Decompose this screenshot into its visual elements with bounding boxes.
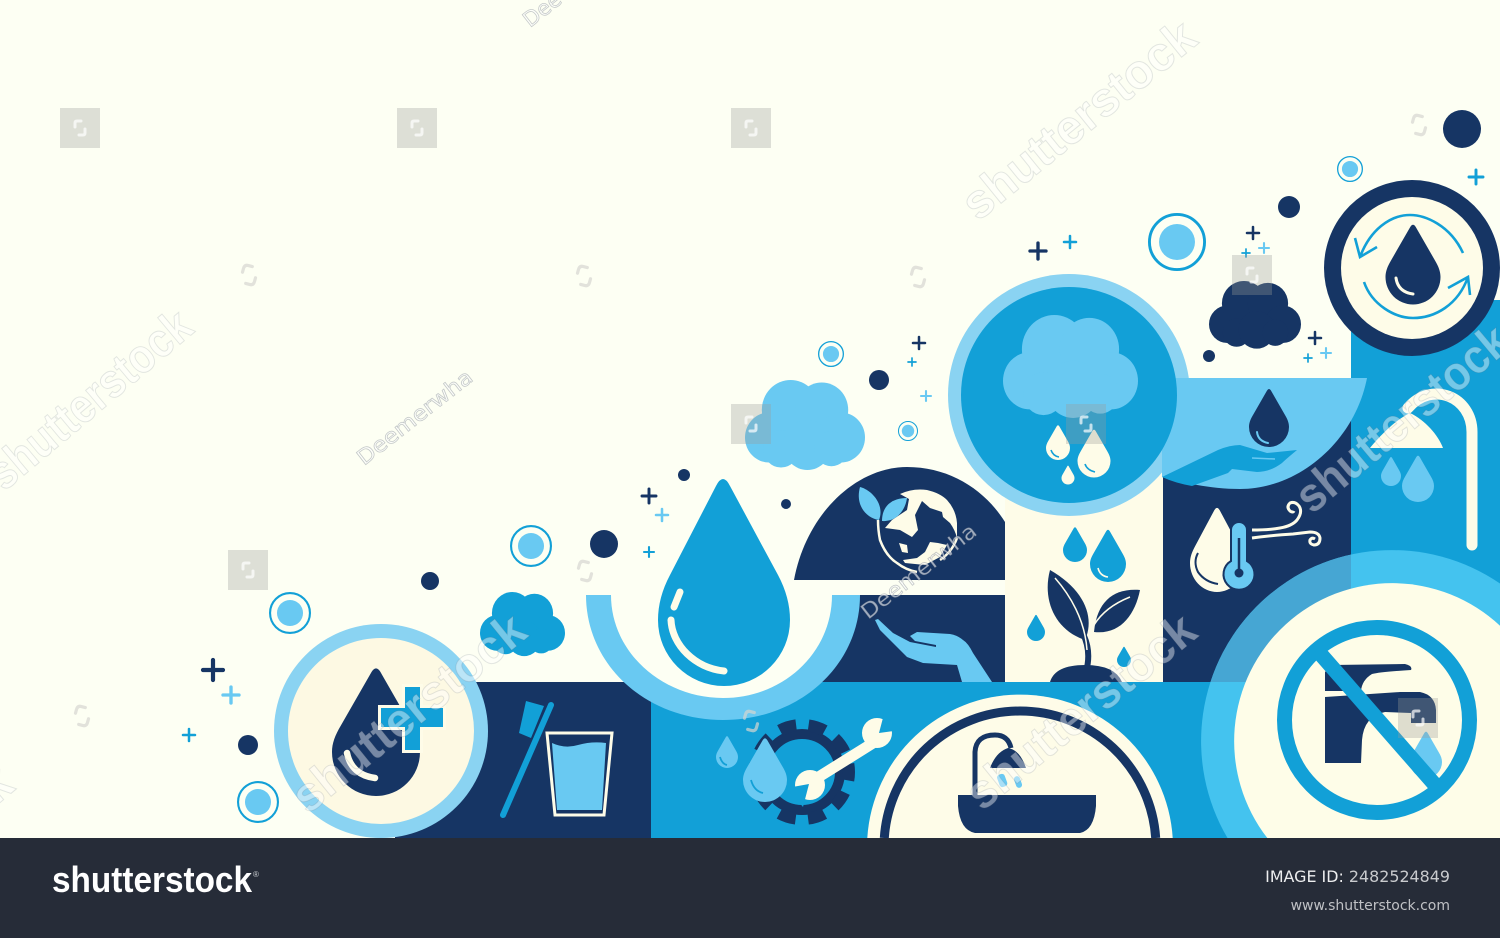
decorative ring bubbles — [237, 156, 1363, 823]
stock watermarks: shutterstock — [952, 10, 1207, 231]
icon: bathtub badge — [867, 695, 1173, 838]
panel: navy toothbrush tile — [395, 682, 652, 838]
mosaic artwork — [274, 180, 1500, 838]
stock watermarks: Deemerwha — [352, 365, 477, 470]
icon: big water drop — [658, 479, 790, 686]
stock watermarks: Deemerwha — [856, 519, 981, 624]
icon: glass of water — [547, 733, 612, 815]
icon: gear and wrench with drops — [716, 714, 901, 819]
footer logo: shutterstock — [52, 859, 253, 900]
panel: navy dome with globe — [794, 467, 1005, 580]
icon: shower on blue column — [1370, 394, 1472, 545]
stock watermarks: shutterstock — [282, 603, 537, 824]
rain circle disc — [961, 287, 1177, 503]
panel: cream plant tile — [1005, 470, 1163, 682]
panel: blue base band — [651, 682, 1500, 838]
icon: plant with drops — [1027, 527, 1140, 682]
icon: prohibited tap — [1284, 628, 1470, 812]
icon: open hand — [875, 619, 992, 682]
clouds — [480, 281, 1301, 656]
panel: blue shower column — [1351, 300, 1500, 682]
light bowl panel — [1162, 378, 1367, 489]
icon: drop thermometer wind — [1190, 502, 1320, 592]
footer image id: IMAGE ID: 2482524849 — [1265, 867, 1450, 886]
icon: drop over hand — [1162, 389, 1297, 486]
footer url: www.shutterstock.com — [1291, 898, 1450, 914]
footer bar — [0, 838, 1500, 938]
left badge ring — [274, 624, 488, 838]
icon: toothbrush — [503, 701, 551, 815]
footer registered mark: ® — [253, 870, 259, 879]
decorative plus signs — [183, 170, 1483, 741]
rain circle outer ring — [948, 274, 1190, 516]
decorative navy dots — [238, 110, 1481, 755]
panel: no-tap ring — [1201, 550, 1500, 838]
icon: rain cloud with drops — [1003, 315, 1138, 484]
stock watermarks: shutterstock — [956, 603, 1207, 821]
icon: globe with leaves — [859, 487, 957, 572]
panel: navy hand tile — [800, 595, 1005, 682]
arc cradle around big drop — [586, 595, 860, 720]
icon: drop with plus — [332, 668, 443, 796]
icon: water cycle badge — [1324, 180, 1500, 356]
panel: navy climate tile — [1163, 400, 1351, 682]
left badge disc — [288, 638, 474, 824]
